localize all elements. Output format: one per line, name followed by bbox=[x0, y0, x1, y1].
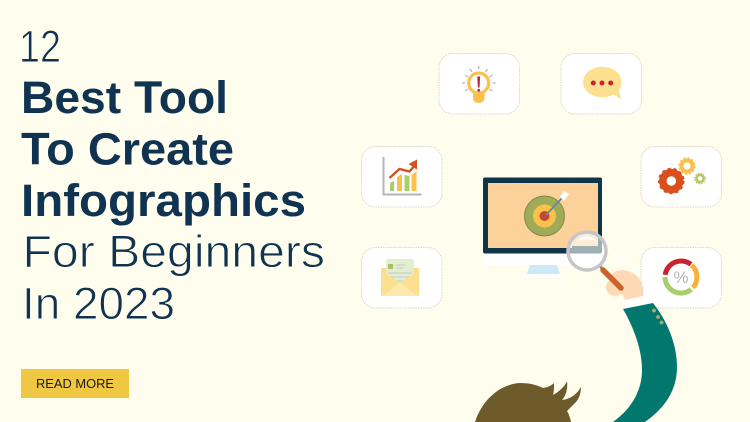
card: envelope bbox=[362, 248, 442, 308]
title: 12 bbox=[19, 21, 61, 72]
title: In 2023 bbox=[22, 278, 175, 329]
card: lightbulb bbox=[439, 54, 520, 114]
button: read more bbox=[21, 369, 129, 398]
card: percent donut: % bbox=[673, 268, 689, 287]
title: For Beginners bbox=[22, 226, 325, 277]
card: speech bubble bbox=[561, 54, 642, 114]
card: gears bbox=[641, 146, 722, 207]
hair bbox=[475, 381, 581, 422]
title: Best Tool bbox=[21, 72, 228, 123]
monitor bbox=[483, 178, 602, 277]
button: read more: READ MORE bbox=[36, 376, 114, 391]
hand with magnifying glass bbox=[568, 232, 643, 300]
title: Infographics bbox=[21, 175, 306, 226]
icon: target with arrow bbox=[524, 191, 569, 236]
card: percent donut bbox=[641, 248, 722, 308]
title: To Create bbox=[21, 124, 234, 174]
title bbox=[19, 21, 325, 329]
sleeve arm bbox=[613, 296, 677, 422]
card: growth chart bbox=[362, 146, 442, 207]
